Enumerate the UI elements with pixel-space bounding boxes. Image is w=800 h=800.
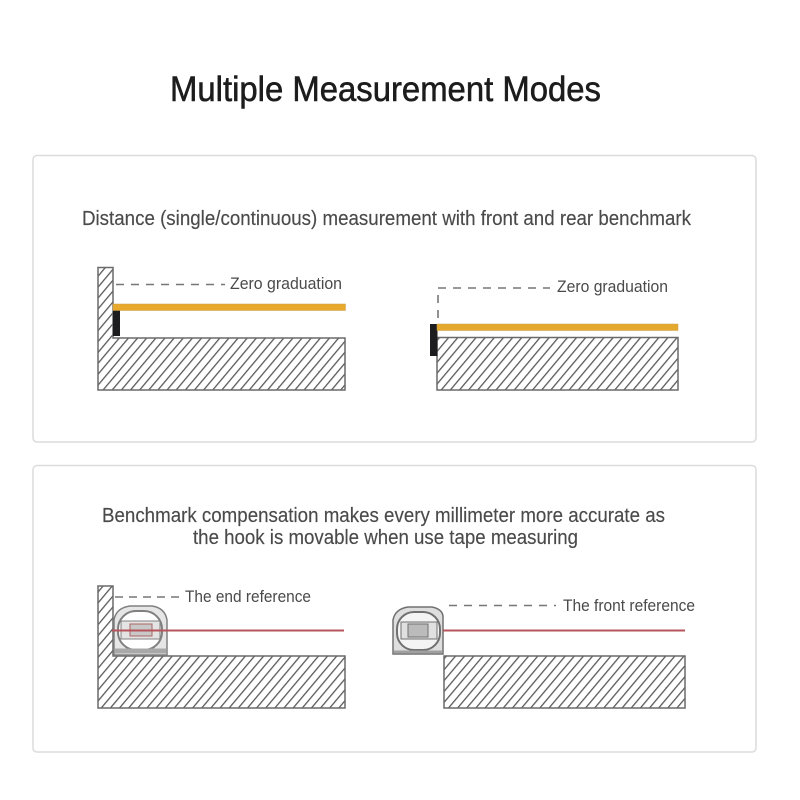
icon: tape measure device [393,607,443,654]
base hatch [437,338,678,390]
laser line [112,630,344,632]
diagram: front benchmark [430,278,678,390]
tape [113,304,346,310]
front hook [430,324,438,356]
panel 2 heading: the hook is movable when use tape measuring [193,527,578,549]
title: Multiple Measurement Modes [170,70,601,109]
dashed line [449,604,556,606]
base hatch [444,656,685,708]
diagram: end reference [98,586,345,708]
wall and base hatch [98,586,345,708]
panel: distance measurement [33,156,756,442]
dashed line [115,596,180,598]
label: Zero graduation [230,275,342,293]
panel: benchmark compensation [33,466,756,752]
dashed line [116,284,225,286]
wall and base hatch [98,268,345,390]
laser line [443,630,685,632]
icon: tape measure device [114,606,167,655]
panel 2 heading: Benchmark compensation makes every millimeter more accurate as [102,505,665,527]
label: The end reference [185,587,311,606]
diagram: front reference [393,596,695,708]
label: Zero graduation [557,278,668,296]
panel 2 heading [102,505,665,549]
tape [437,324,678,330]
diagram: rear benchmark [98,268,346,390]
rear hook [113,310,120,336]
dashed line [438,288,550,318]
panel 1 heading: Distance (single/continuous) measurement with front and rear benchmark [82,208,692,230]
label: The front reference [563,596,695,615]
